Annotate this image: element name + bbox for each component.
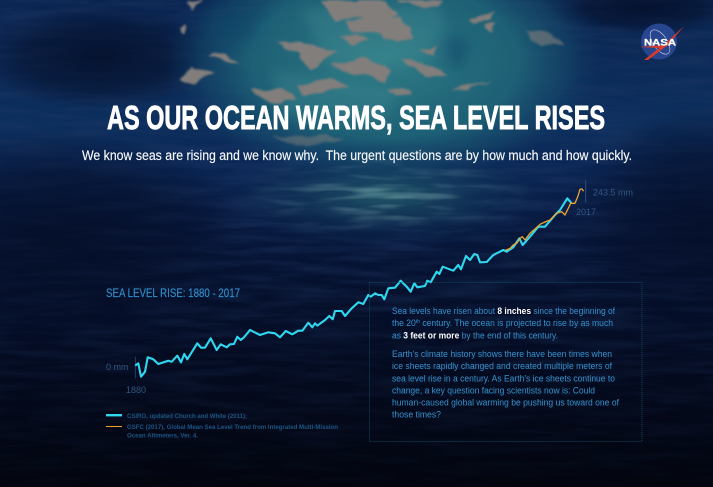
paragraph 1 — [392, 306, 615, 342]
paragraph 1: Sea levels have risen about 8 inches since the beginning of — [392, 306, 615, 317]
subtitle: We know seas are rising and we know why. The urgent questions are by how much and how quickly. — [82, 148, 632, 163]
legend: GSFC: Ocean Altimeters, Ver. 4. — [127, 432, 198, 440]
paragraph 2 — [392, 349, 619, 420]
axis label: 243.5 mm: 243.5 mm — [593, 188, 633, 198]
axis label: 0 mm: 0 mm — [106, 362, 128, 372]
GSFC series — [506, 189, 583, 250]
panel: explanation text box — [370, 282, 642, 442]
axis label: 1880: 1880 — [126, 385, 146, 395]
paragraph 2: sea level rise in a century. As Earth’s ice sheets continue to — [392, 374, 615, 384]
end tick — [585, 180, 587, 202]
NASA logo: NASA — [644, 38, 676, 48]
paragraph 1: th — [416, 319, 420, 325]
paragraph 1: the 20 — [392, 318, 419, 329]
paragraph 2: change, a key question facing scientists now is: Could — [392, 386, 595, 396]
paragraph 2: Earth’s climate history shows there have been times when — [392, 349, 612, 360]
legend — [106, 413, 338, 440]
legend: CSIRO: CSIRO, updated Church and White (2011); — [127, 413, 247, 420]
paragraph 1: as 3 feet or more by the end of this century. — [392, 330, 558, 342]
paragraph 2: human-caused global warming be pushing us toward one of — [392, 398, 619, 408]
CSIRO series — [136, 198, 571, 377]
legend: GSFC — [106, 424, 338, 440]
axis label: 2017: 2017 — [576, 207, 596, 217]
legend: GSFC: GSFC (2017), Global Mean Sea Level Trend from Integrated Multi-Mission — [127, 424, 338, 431]
line chart: sea level rise — [135, 180, 586, 378]
NASA logo — [639, 24, 684, 60]
chart heading: SEA LEVEL RISE: 1880 - 2017 — [106, 288, 240, 300]
paragraph 2: ice sheets rapidly changed and created multiple meters of — [392, 361, 612, 372]
start tick — [134, 357, 136, 378]
paragraph 1: century. The ocean is projected to rise by as much — [420, 318, 613, 329]
paragraph 2: those times? — [392, 410, 441, 420]
